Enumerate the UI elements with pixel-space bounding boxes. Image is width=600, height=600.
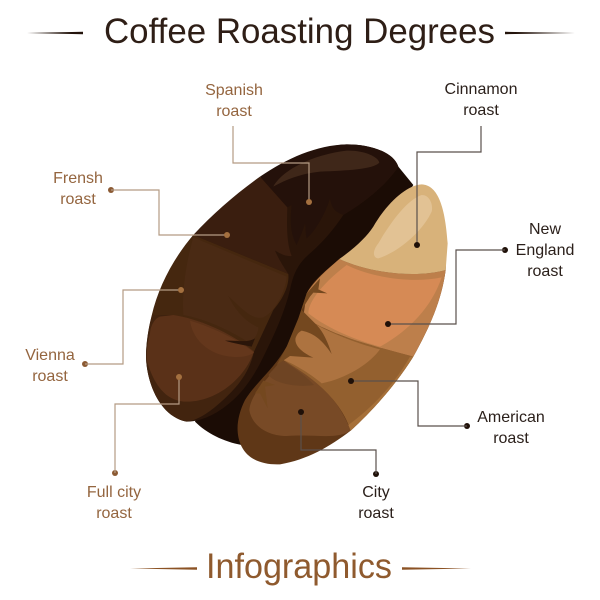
segment: American lighter face: [282, 318, 380, 383]
callout: Spanish roast: Spanish: [205, 82, 263, 99]
segment: Spanish roast: [260, 144, 398, 245]
segment: Frensh roast: [193, 177, 292, 274]
segment: City roast face: [249, 360, 351, 436]
coffee bean: [146, 144, 448, 464]
highlight: Cinnamon roast: [374, 195, 432, 258]
segment: Cinnamon roast: [339, 184, 448, 274]
segment: Full city roast rim: [146, 315, 254, 422]
left lobe base with crease strip: [146, 144, 398, 422]
callout: American roast: [348, 378, 545, 447]
segment: Vienna roast rim: [152, 235, 288, 352]
callout: City roast: [298, 409, 394, 522]
dark bean core: [195, 163, 413, 445]
callout: Full city roast: roast: [96, 505, 132, 522]
highlight: Spanish roast: [273, 151, 379, 187]
callout: Full city roast: [87, 374, 182, 522]
segment: American roast base: [282, 317, 413, 431]
callout: New England roast: England: [516, 242, 574, 259]
callout: New England roast: New: [529, 221, 561, 238]
callout: American roast: roast: [493, 430, 529, 447]
callout: Cinnamon roast: [414, 81, 517, 248]
segment: City roast upper bump: [268, 360, 314, 386]
segment: New England lighter face: [308, 265, 442, 347]
callout: Spanish roast: [205, 82, 312, 205]
segment: American roast rim: [348, 357, 413, 431]
callout: New England roast: roast: [527, 263, 563, 280]
callout: City roast: City: [362, 484, 390, 501]
footer heading: Infographics: [206, 547, 392, 586]
crease veins right: [255, 278, 332, 408]
callout: Cinnamon roast: roast: [463, 102, 499, 119]
title: Coffee Roasting Degrees: [104, 12, 495, 51]
callout: Vienna roast: Vienna: [25, 347, 75, 364]
segment: Vienna roast: [183, 237, 287, 343]
segment: Full city lighter shadow: [190, 321, 254, 357]
callout: Cinnamon roast: Cinnamon: [445, 81, 517, 98]
segment: New England roast rim: [303, 259, 446, 357]
callout: Frensh roast: roast: [60, 191, 96, 208]
callout: Spanish roast: roast: [216, 103, 252, 120]
callout: Full city roast: Full city: [87, 484, 141, 501]
callout: Vienna roast: [25, 287, 184, 385]
callout: American roast: American: [477, 409, 545, 426]
callout: City roast: roast: [358, 505, 394, 522]
callout: Vienna roast: roast: [32, 368, 68, 385]
callout: Frensh roast: [53, 170, 230, 238]
callout: Frensh roast: Frensh: [53, 170, 103, 187]
crease veins left: [225, 338, 255, 347]
right lobe shadow base: [238, 243, 447, 464]
segment: Full city roast: [147, 315, 254, 402]
callout: New England roast: [385, 221, 574, 327]
